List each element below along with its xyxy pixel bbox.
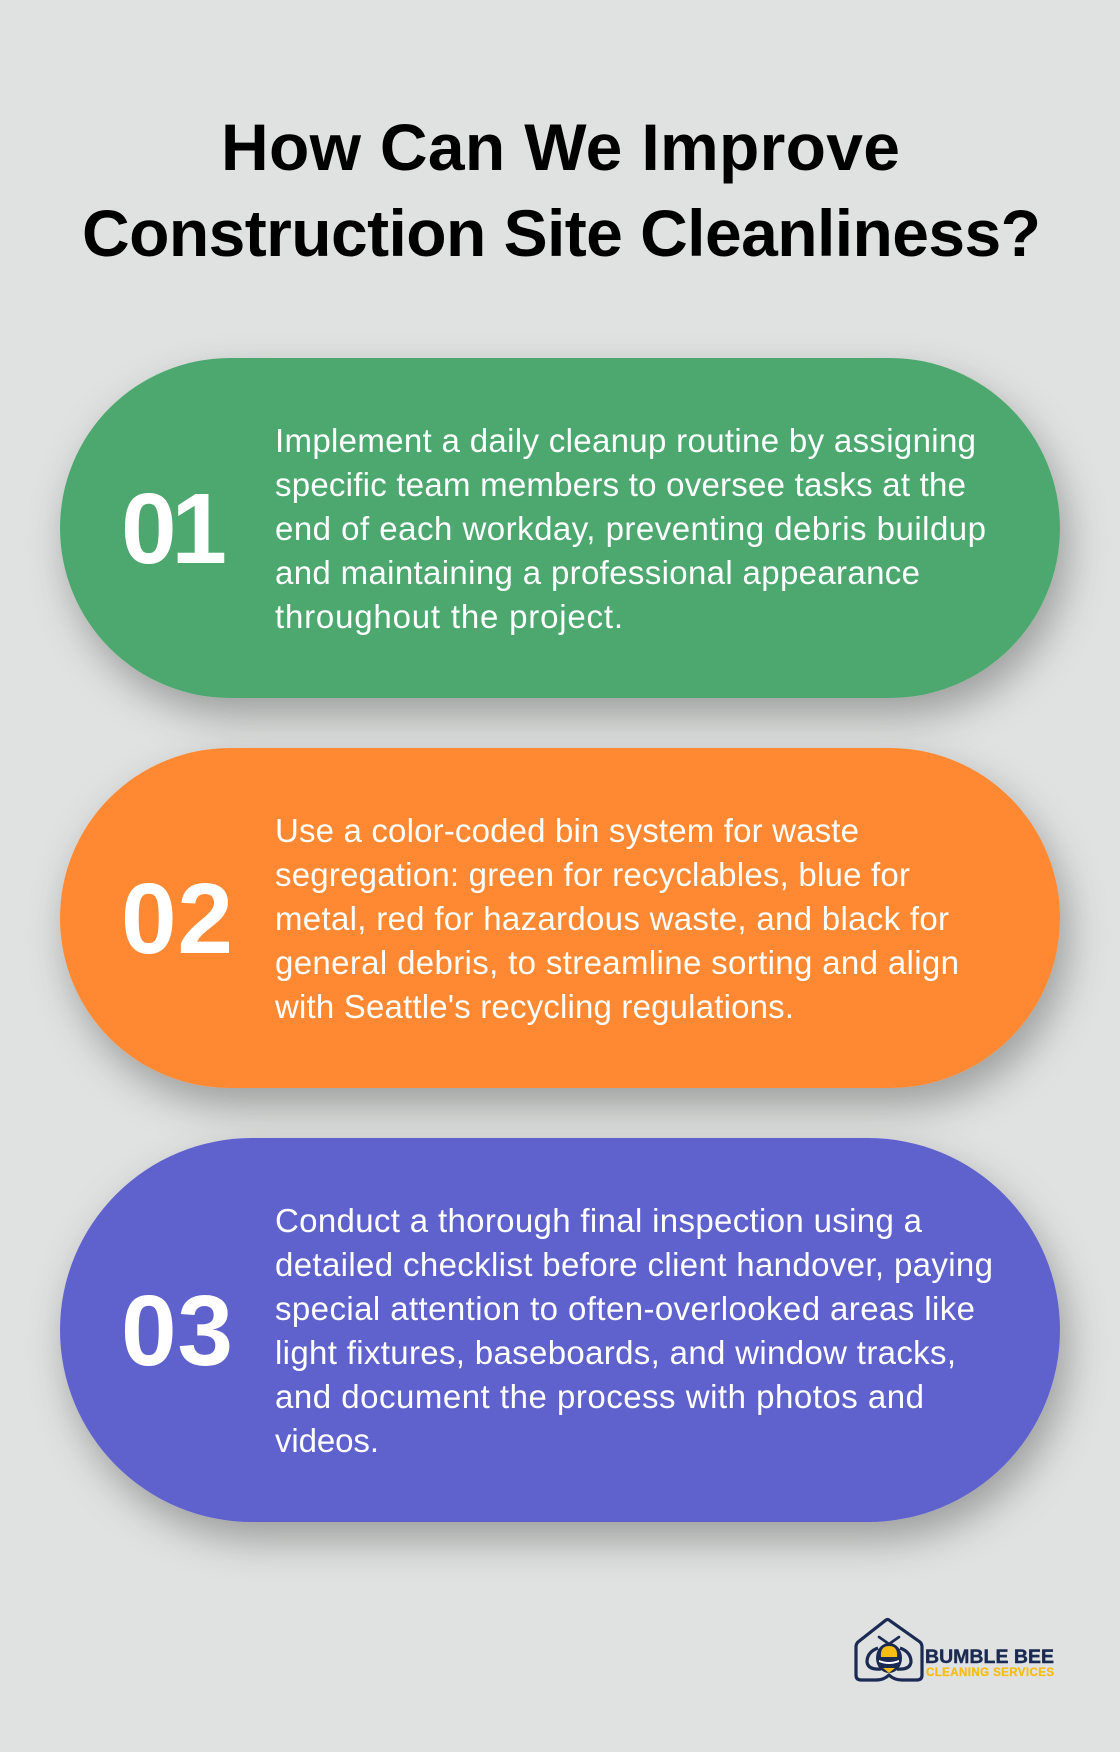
step 01 text: specific team members to oversee tasks at the	[275, 466, 966, 503]
step 03 text	[275, 1202, 993, 1459]
step 02 text: with Seattle's recycling regulations.	[274, 988, 794, 1025]
number 03: 03	[121, 1275, 233, 1387]
step 03 text: detailed checklist before client handover, paying	[275, 1246, 993, 1283]
step 01 text: end of each workday, preventing debris buildup	[275, 510, 986, 547]
panel: step 03	[60, 1138, 1060, 1522]
logo: Bumble Bee Cleaning Services	[856, 1620, 1054, 1680]
step 01 text: throughout the project.	[275, 598, 623, 635]
panel: step 01	[60, 358, 1060, 698]
step 03 text: Conduct a thorough final inspection using a	[275, 1202, 923, 1239]
step 03 text: and document the process with photos and	[275, 1378, 924, 1415]
step 02 text: metal, red for hazardous waste, and black for	[275, 900, 949, 937]
step 02 text: Use a color-coded bin system for waste	[275, 812, 859, 849]
title: Construction Site Cleanliness?	[82, 196, 1041, 270]
number 01: 01	[121, 473, 227, 585]
title: How Can We Improve	[221, 110, 900, 184]
step 01 text	[275, 422, 986, 635]
logo wordmark: BUMBLE BEE	[925, 1646, 1054, 1668]
step 03 text: videos.	[275, 1422, 379, 1459]
step 03 text: light fixtures, baseboards, and window tracks,	[275, 1334, 956, 1371]
step 02 text: segregation: green for recyclables, blue for	[275, 856, 910, 893]
title	[82, 110, 1041, 270]
purple pill background	[60, 1138, 1060, 1522]
icon: house with bee	[856, 1620, 922, 1680]
orange pill background	[60, 748, 1060, 1088]
panel: step 02	[60, 748, 1060, 1088]
step 01 text: Implement a daily cleanup routine by assigning	[275, 422, 976, 459]
logo tagline: CLEANING SERVICES	[926, 1667, 1054, 1679]
step 02 text: general debris, to streamline sorting and align	[275, 944, 959, 981]
step 03 text: special attention to often-overlooked areas like	[275, 1290, 975, 1327]
step 01 text: and maintaining a professional appearance	[275, 554, 920, 591]
step 02 text	[274, 812, 959, 1025]
green pill background	[60, 358, 1060, 698]
number 02: 02	[121, 863, 233, 975]
